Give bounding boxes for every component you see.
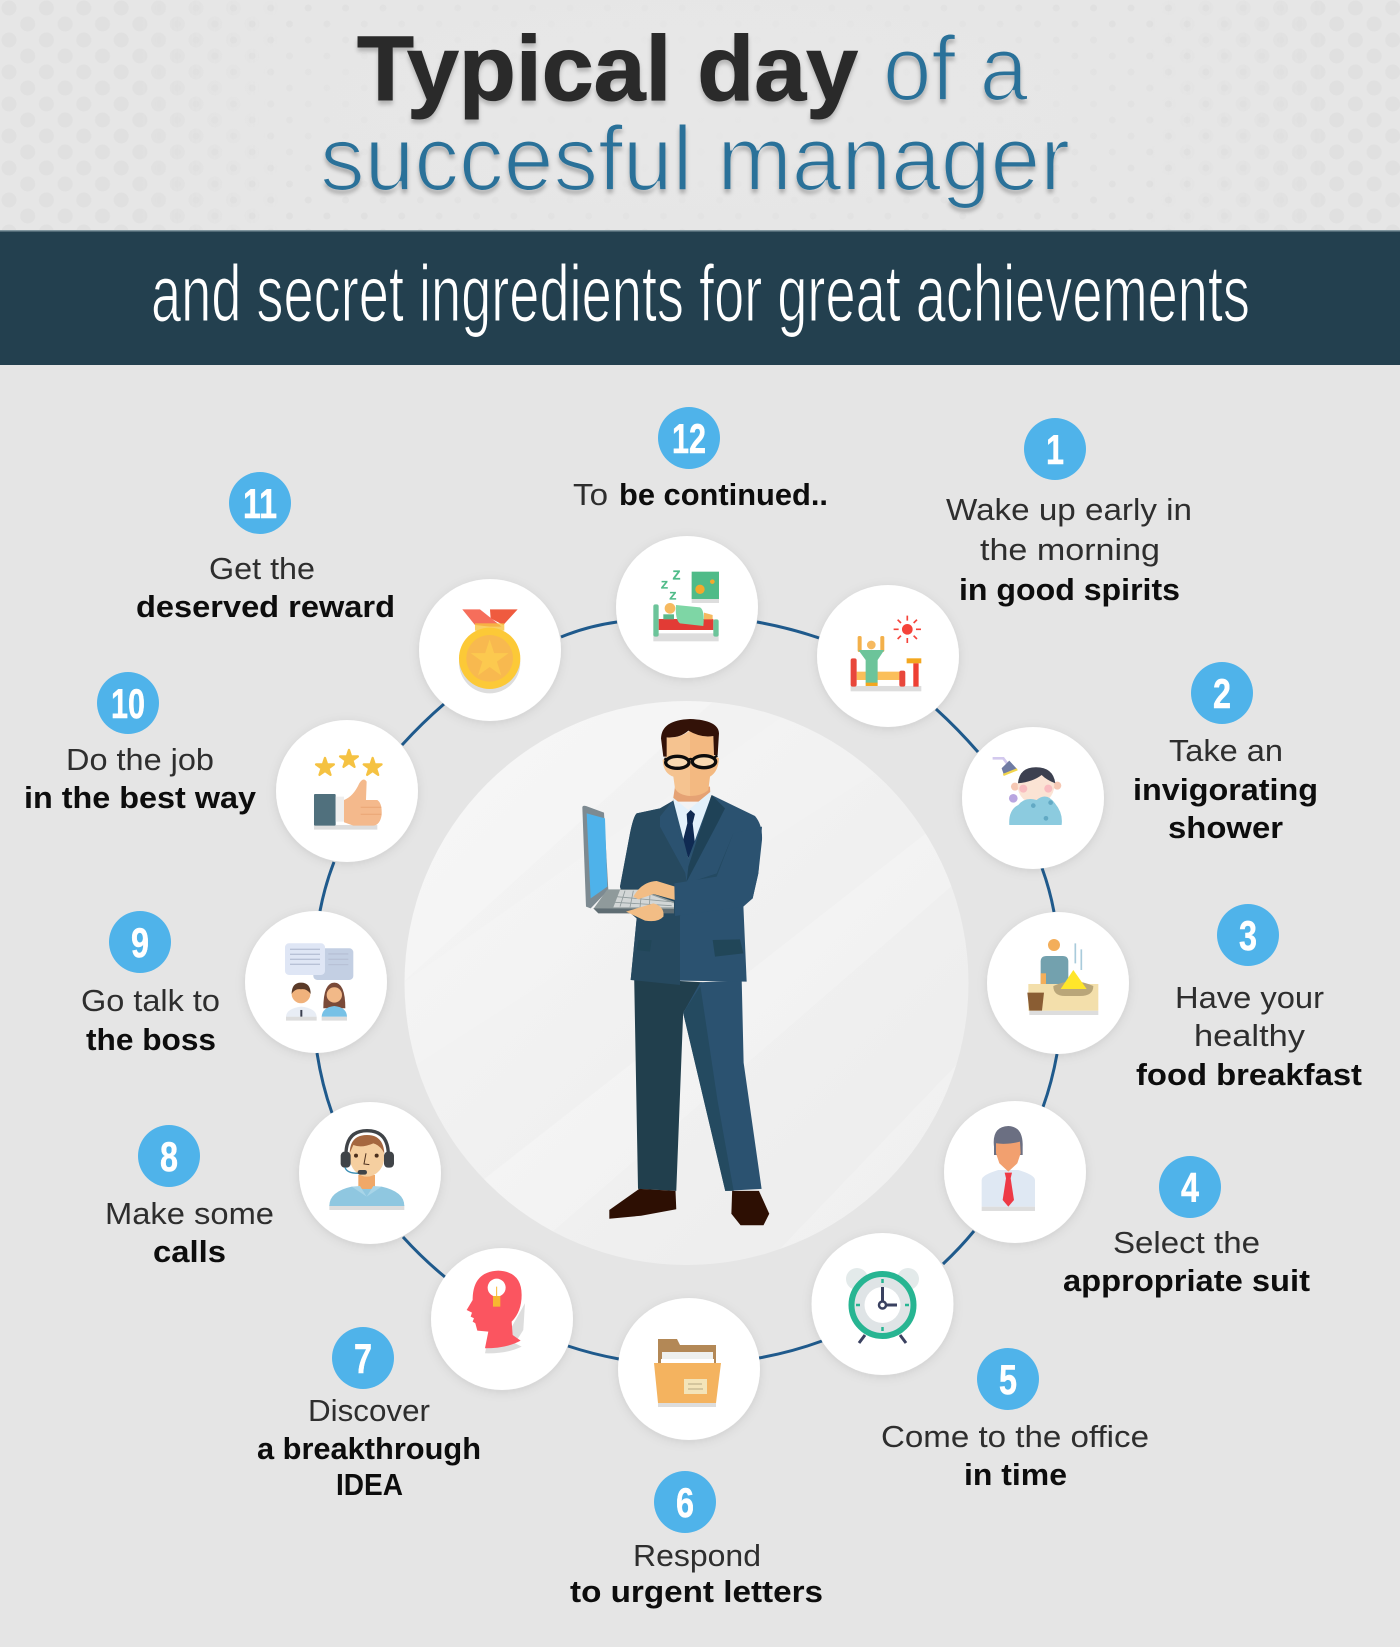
step 2 label — [1133, 662, 1318, 845]
step 1 icon circle: waking up — [817, 585, 959, 727]
step 11 label: deserved reward — [136, 589, 395, 624]
step 8 label: 8 — [160, 1133, 178, 1180]
step 1 label: 1 — [1046, 426, 1064, 473]
step 7 label: 7 — [354, 1335, 372, 1382]
step 6 label: 6 — [676, 1479, 694, 1526]
step 9 label: 9 — [131, 919, 149, 966]
connecting ring arcs — [317, 622, 1057, 1359]
step 10 label: 10 — [111, 680, 145, 727]
head — [661, 719, 719, 796]
step 2 label: 2 — [1213, 670, 1231, 717]
step 12 icon circle: sleeping — [616, 536, 758, 678]
collar — [673, 792, 711, 858]
trousers and shoes — [609, 978, 769, 1225]
step 10 label: in the best way — [24, 780, 257, 815]
title: of a — [883, 18, 1029, 120]
subtitle band — [0, 230, 1400, 365]
step 5 label: 5 — [999, 1356, 1017, 1403]
step 12 icon circle: sleeping: Z — [673, 568, 681, 582]
step 12 label: be continued.. — [619, 477, 828, 512]
step 6 label — [570, 1471, 823, 1609]
step 2 icon circle: shower — [962, 727, 1104, 869]
step 12 label: To — [573, 477, 608, 512]
step 12 icon circle: sleeping: Z — [661, 580, 668, 592]
title — [320, 18, 1070, 210]
step 7 label: Discover — [308, 1393, 430, 1428]
upper body — [582, 719, 762, 985]
laptop — [582, 806, 674, 913]
step 9 icon circle: talk — [245, 911, 387, 1053]
step 10 icon circle: thumbs up and stars — [276, 720, 418, 862]
step 7 icon circle: idea head — [431, 1248, 573, 1390]
step 8 icon circle: headset calls — [299, 1102, 441, 1244]
step 1 label: Wake up early in — [946, 492, 1192, 527]
manager figure — [582, 719, 769, 1225]
forearm — [674, 827, 762, 916]
step 8 label — [105, 1125, 274, 1269]
step 3 label — [1136, 904, 1362, 1092]
step 10 label: Do the job — [66, 742, 214, 777]
step 6 label: to urgent letters — [570, 1574, 823, 1609]
step 11 label — [136, 472, 395, 624]
step 5 label: in time — [964, 1457, 1067, 1492]
hands — [626, 881, 675, 921]
step 2 label: invigorating — [1133, 772, 1318, 807]
step 4 label: 4 — [1181, 1164, 1199, 1211]
tie — [683, 810, 695, 858]
central circle background — [400, 690, 980, 1280]
step 11 label: Get the — [209, 551, 315, 586]
step 3 label: healthy — [1194, 1018, 1306, 1053]
step 10 label — [24, 672, 257, 815]
jacket — [620, 795, 762, 985]
step 11 icon circle: medal — [419, 579, 561, 721]
step 4 icon circle: suit — [944, 1101, 1086, 1243]
step 7 label — [257, 1327, 481, 1502]
step 4 label — [1063, 1156, 1310, 1298]
neck — [673, 787, 711, 802]
step 3 label: food breakfast — [1136, 1057, 1362, 1092]
step 5 label: Come to the office — [881, 1419, 1149, 1454]
step 5 icon circle: alarm clock — [812, 1233, 954, 1375]
step 2 label: Take an — [1169, 733, 1283, 768]
step 3 label: Have your — [1175, 980, 1324, 1015]
step 9 label: the boss — [86, 1022, 216, 1057]
step 12 label — [573, 407, 828, 512]
step 12 icon circle: sleeping: Z — [669, 590, 676, 602]
step 6 icon circle: folder — [618, 1298, 760, 1440]
step 3 label: 3 — [1239, 912, 1257, 959]
title: succesful manager — [320, 108, 1070, 210]
step 8 label: Make some — [105, 1196, 274, 1231]
step 4 label: Select the — [1113, 1225, 1260, 1260]
step 9 label — [81, 911, 220, 1057]
step 1 label: in good spirits — [959, 572, 1180, 607]
step 11 label: 11 — [243, 480, 277, 527]
title: Typical day — [357, 18, 858, 120]
step 12 label: 12 — [672, 415, 706, 462]
step 3 icon circle: breakfast — [987, 912, 1129, 1054]
step 9 label: Go talk to — [81, 983, 220, 1018]
step 7 label: IDEA — [336, 1467, 403, 1502]
step 1 label — [946, 418, 1192, 607]
step 4 label: appropriate suit — [1063, 1263, 1310, 1298]
step 8 label: calls — [153, 1234, 226, 1269]
step 6 label: Respond — [633, 1538, 761, 1573]
header pattern panel — [0, 0, 1400, 255]
step 1 label: the morning — [980, 532, 1160, 567]
step 2 label: shower — [1168, 810, 1283, 845]
step 5 label — [881, 1348, 1149, 1492]
step 7 label: a breakthrough — [257, 1431, 481, 1466]
